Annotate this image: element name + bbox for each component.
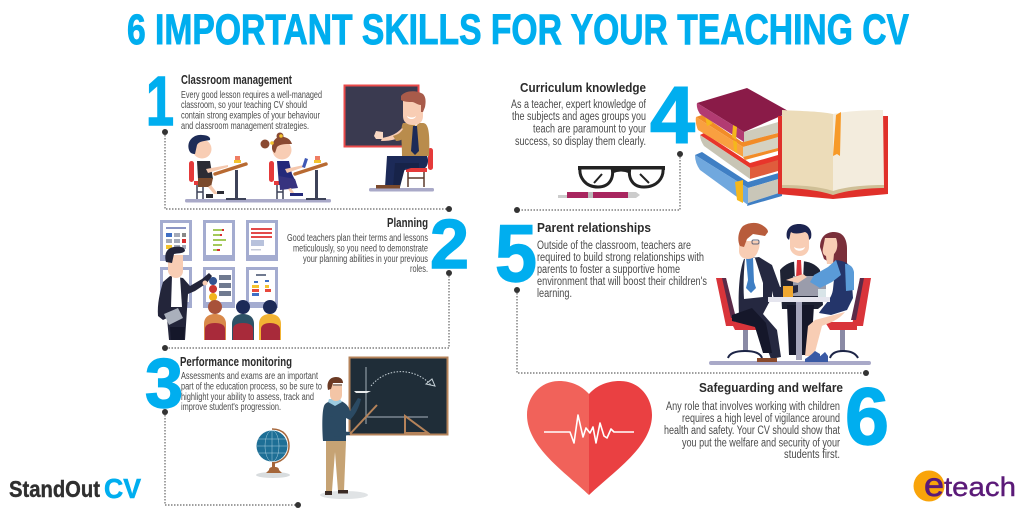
panel: classroom management xyxy=(146,62,434,202)
text: classroom management: and classroom management strategies. xyxy=(181,121,309,132)
text: curriculum knowledge: As a teacher, expert knowledge of xyxy=(511,99,647,111)
logo: StandOut CV: StandOut xyxy=(9,476,100,502)
text: safeguarding and welfare: Any role that involves working with children xyxy=(666,401,840,413)
illustration: teacher with pointer xyxy=(320,377,377,499)
text: classroom management: Every good lesson requires a well-managed xyxy=(181,90,322,101)
connector: 1 to 2 xyxy=(162,129,452,212)
text: classroom management: classroom, so your teaching CV should xyxy=(181,100,307,111)
heading: classroom management: Classroom management xyxy=(181,72,292,87)
logo: StandOut CV xyxy=(9,473,141,504)
text: planning: roles. xyxy=(410,264,428,275)
text: classroom management xyxy=(181,90,322,132)
text: planning: Good teachers plan their terms and lessons xyxy=(287,233,428,244)
connector: 2 to 3 xyxy=(162,270,452,351)
heading: performance monitoring: Performance monitoring xyxy=(180,354,292,369)
panel: planning xyxy=(158,205,469,340)
text: planning: your planning abilities in your previous xyxy=(303,254,428,265)
illustration: presenter xyxy=(158,247,212,340)
number 2: 2 xyxy=(430,205,469,283)
text: safeguarding and welfare: you put the welfare and security of your xyxy=(682,438,840,450)
number 1: 1 xyxy=(146,62,174,140)
panel: safeguarding and welfare xyxy=(527,372,889,495)
heading: curriculum knowledge: Curriculum knowledge xyxy=(520,80,646,95)
text: parent relationships: required to build strong relationships with xyxy=(537,252,704,264)
text: planning: meticulously, so you need to demonstrate xyxy=(293,244,428,254)
text: parent relationships: Outside of the classroom, teachers are xyxy=(537,240,691,252)
icon: heart with heartbeat xyxy=(527,381,652,495)
text: curriculum knowledge: the subjects and ages groups you xyxy=(512,111,646,123)
text: safeguarding and welfare xyxy=(664,401,841,461)
text: curriculum knowledge xyxy=(511,99,647,148)
text: parent relationships: parents to foster a supportive home xyxy=(537,264,680,276)
illustration: stack of books xyxy=(695,88,790,206)
illustration: audience xyxy=(204,300,281,340)
panel: parent relationships xyxy=(495,209,871,365)
number 4: 4 xyxy=(650,71,695,161)
illustration: open book xyxy=(778,110,888,199)
text: safeguarding and welfare: requires a high level of vigilance around xyxy=(682,413,840,425)
logo: eteach: e xyxy=(924,466,944,503)
text: curriculum knowledge: success, so display them clearly. xyxy=(515,136,646,148)
heading: safeguarding and welfare: Safeguarding and welfare xyxy=(699,380,843,395)
text: curriculum knowledge: teach are paramount to your xyxy=(533,124,646,136)
text: parent relationships xyxy=(537,240,707,300)
text: classroom management: contain strong examples of your behaviour xyxy=(181,110,320,122)
text: performance monitoring: part of the education process, so be sure to xyxy=(181,382,322,392)
number 6: 6 xyxy=(845,372,889,462)
illustration: graph blackboard xyxy=(350,358,448,434)
connector: 3 to end xyxy=(162,409,301,508)
illustration: two pupils at desks xyxy=(185,132,331,202)
illustration: glasses and pen xyxy=(558,166,665,198)
text: performance monitoring xyxy=(181,371,322,413)
illustration: teacher at chalkboard xyxy=(344,86,434,192)
logo: StandOut CV: CV xyxy=(104,473,141,504)
text: parent relationships: learning. xyxy=(537,288,572,300)
heading: parent relationships: Parent relationships xyxy=(537,220,651,235)
text: planning xyxy=(287,233,428,275)
illustration: globe xyxy=(256,429,290,478)
illustration: wall charts xyxy=(160,220,278,308)
text: safeguarding and welfare: students first. xyxy=(784,449,840,461)
illustration: meeting with parents xyxy=(709,223,871,365)
text: safeguarding and welfare: health and safety. Your CV should show that xyxy=(664,425,841,437)
logo: eteach xyxy=(914,466,1016,503)
text: performance monitoring: Assessments and exams are an important xyxy=(181,371,318,382)
text: parent relationships: environment that will boost their children's xyxy=(537,276,707,288)
connector: 5 to 6 xyxy=(514,287,869,376)
number 3: 3 xyxy=(145,344,183,422)
connector: 4 to 5 xyxy=(514,151,683,213)
logo: eteach: teach xyxy=(944,472,1016,502)
panel: performance monitoring xyxy=(145,344,448,499)
text: performance monitoring: improve student's progression. xyxy=(181,402,281,413)
text: performance monitoring: highlight your ability to assess, track and xyxy=(181,392,314,403)
panel: curriculum knowledge xyxy=(511,71,888,206)
number 5: 5 xyxy=(495,209,537,299)
heading: planning: Planning xyxy=(387,215,428,230)
